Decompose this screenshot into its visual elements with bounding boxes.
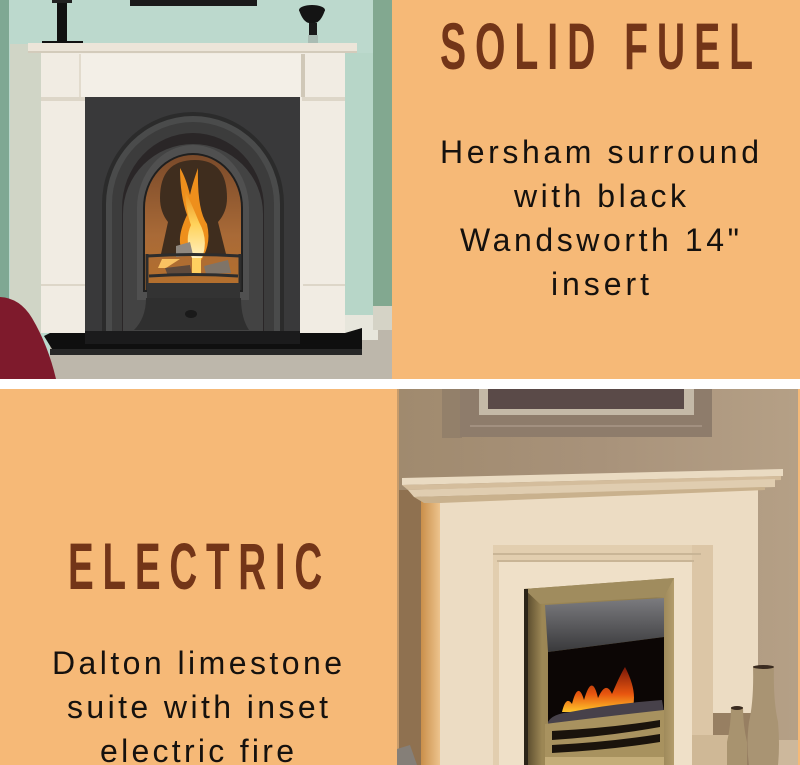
red chair <box>0 297 56 379</box>
shadow below right leg <box>713 680 758 765</box>
limestone surround <box>440 486 758 765</box>
coal bed <box>548 700 664 724</box>
brass fret and bars <box>545 710 664 765</box>
brass fire frame <box>524 578 674 765</box>
hood <box>545 598 664 652</box>
photo: solid fuel fireplace <box>0 0 392 379</box>
photo: electric fireplace <box>397 389 798 765</box>
heading: electric: ELECTRIC <box>68 529 331 603</box>
left side of chimney <box>399 490 440 765</box>
black hearth <box>44 328 362 355</box>
text block: electric description <box>52 645 342 765</box>
floor carpet and skirting <box>50 306 392 379</box>
decorative object <box>397 745 417 765</box>
vases <box>727 665 779 765</box>
flame <box>158 168 208 274</box>
firebox <box>548 637 664 722</box>
text block: electric description: suite with inset <box>67 689 328 725</box>
black slate panel <box>85 97 300 332</box>
mantel surround <box>28 43 357 333</box>
arched cast iron insert <box>102 112 284 332</box>
ash pan <box>134 283 249 330</box>
picture frame <box>442 389 712 438</box>
wall <box>397 389 798 765</box>
text block: solid fuel description <box>440 134 759 302</box>
text block: solid fuel description: with black <box>513 178 687 214</box>
text block: solid fuel description: Wandsworth 14" <box>460 222 739 258</box>
coals <box>165 242 231 276</box>
mantel shelf <box>402 469 783 503</box>
picture frame bottom <box>130 0 257 6</box>
ornament: black goblet <box>299 5 325 43</box>
text block: electric description: Dalton limestone <box>52 645 342 681</box>
text block: solid fuel description: insert <box>551 266 649 302</box>
wall <box>0 0 392 379</box>
fire basket bars <box>147 254 240 290</box>
text block: solid fuel description: Hersham surround <box>440 134 759 170</box>
electric flames <box>562 667 634 712</box>
wall shelf right of the surround <box>758 740 798 765</box>
ornament: black stand <box>42 0 83 43</box>
